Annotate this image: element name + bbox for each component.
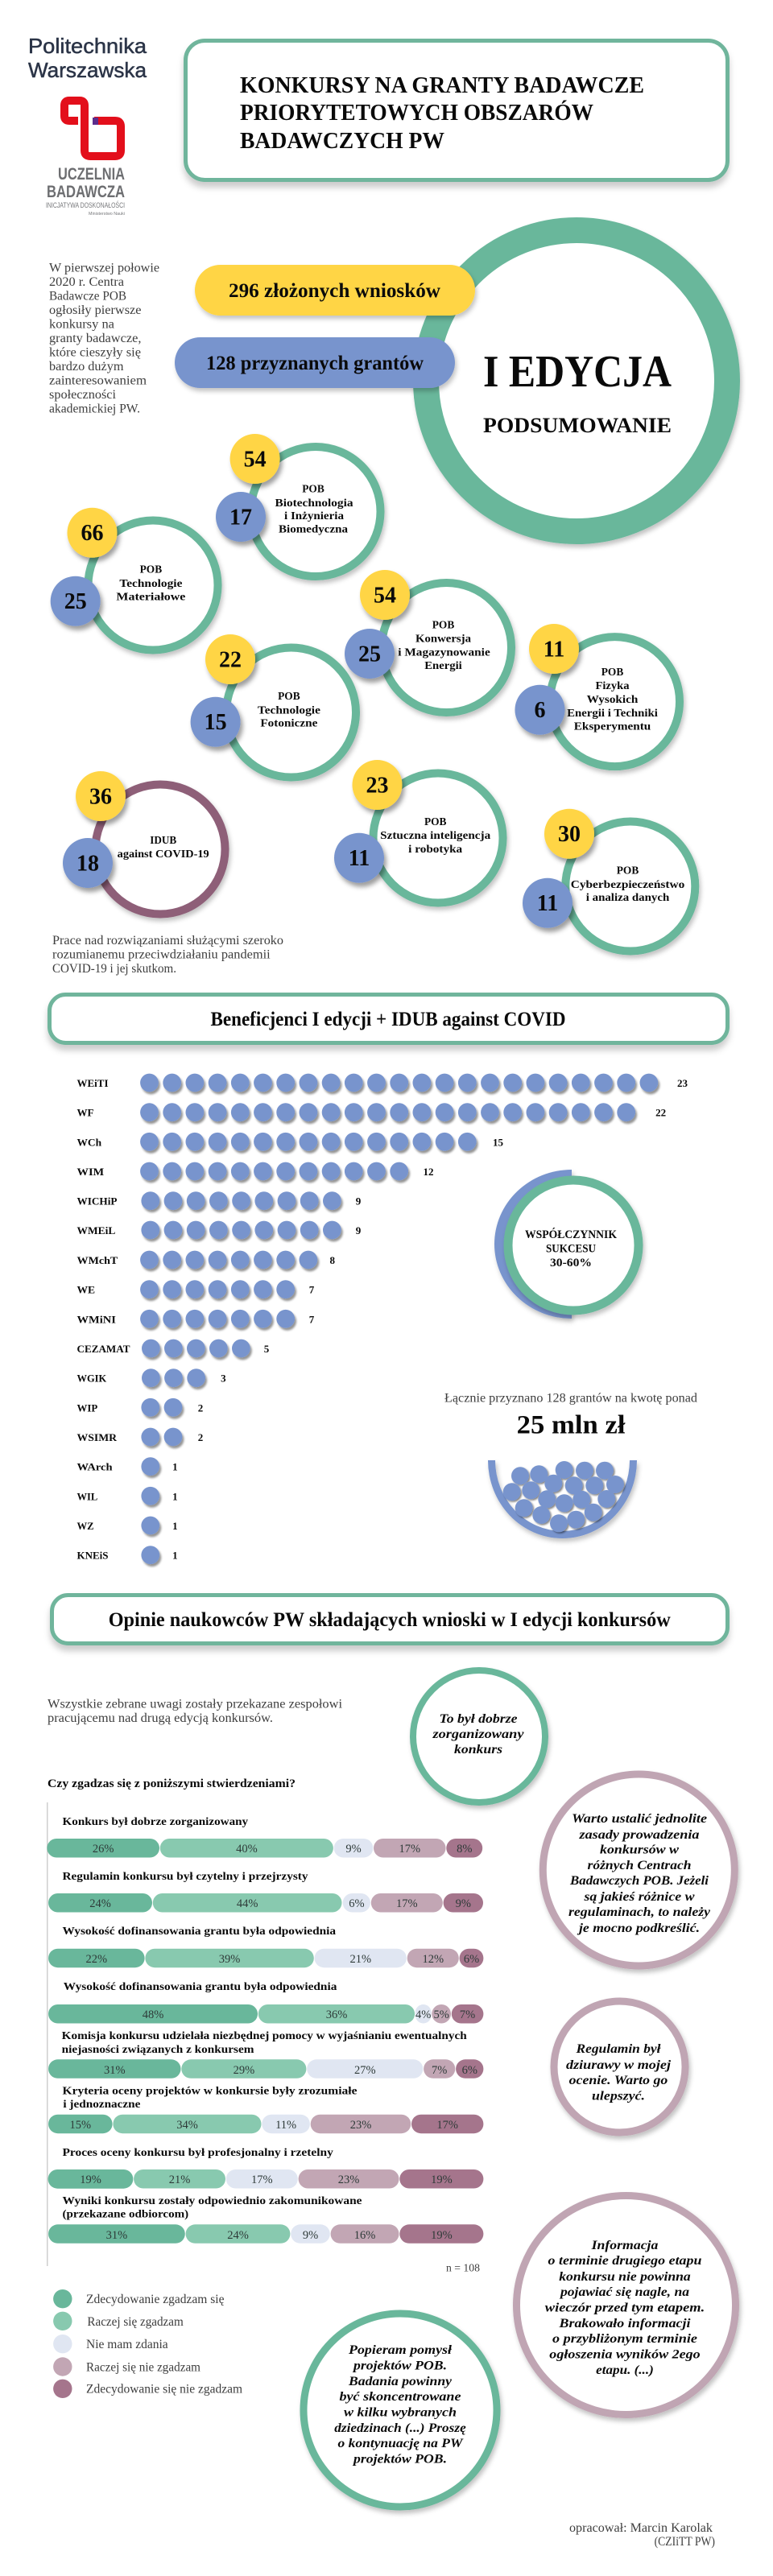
- dot row: KNEiS 1: 1: [172, 1550, 178, 1562]
- ring: POB Cyberbezpieczeństwo: POB: [617, 865, 639, 877]
- ring: POB Biotechnologia: 54: [244, 448, 267, 472]
- total amount text: [444, 1392, 697, 1440]
- total amount text: Łącznie przyznano 128 grantów na kwotę ponad: [444, 1392, 697, 1406]
- bar: Wysokość dofinansowania 2: 48%: [143, 2008, 163, 2021]
- quote: Regulamin był dziurawy: [554, 2001, 685, 2132]
- ring: POB Technologie Fotoniczne: Technologie: [258, 705, 320, 717]
- ring: POB Konwersja: 25: [358, 642, 381, 667]
- dot row: WMchT 8: WMchT: [77, 1254, 118, 1266]
- bar: Wyniki konkursu: (przekazane odbiorcom): [63, 2209, 189, 2221]
- dot row: WEiTI 23: [77, 1074, 688, 1092]
- ring: POB Sztuczna inteligencja: 11: [349, 846, 370, 871]
- dot row: WCh 15: [77, 1133, 504, 1151]
- quote: Warto ustalić jednolite zasady: Badawczych POB. Jeżeli: [569, 1874, 709, 1888]
- quote: Warto ustalić jednolite zasady: różnych Centrach: [588, 1859, 692, 1872]
- ring: POB Fizyka: POB: [601, 667, 623, 679]
- success rate ring: 30-60%: [550, 1257, 592, 1269]
- quote: Informacja o terminie: Informacja: [591, 2239, 658, 2252]
- title panel: BADAWCZYCH PW: [240, 129, 444, 154]
- quote: Popieram pomysł: o kontynuację na PW: [338, 2437, 464, 2450]
- quote: Popieram pomysł: Popieram pomysł: [348, 2343, 453, 2357]
- quote: To był dobrze zorganizowany konkurs: To był dobrze: [440, 1712, 517, 1726]
- bar: Wysokość dofinansowania 1: 12%: [423, 1953, 444, 1966]
- quote: Popieram pomysł: [304, 2314, 497, 2507]
- ring: POB Technologie Fotoniczne: POB: [278, 691, 300, 703]
- dot row: WF 22: 22: [655, 1107, 666, 1119]
- ring: POB Cyberbezpieczeństwo: Cyberbezpieczeństwo: [571, 879, 684, 891]
- ring: POB Konwersja: 54: [374, 583, 396, 609]
- quote: Warto ustalić jednolite zasady: [543, 1774, 734, 1966]
- ring: POB Konwersja: Energii: [424, 660, 462, 672]
- ring: POB Biotechnologia: Biotechnologia: [275, 497, 353, 510]
- dot row: WF 22: [77, 1103, 666, 1121]
- quote: Warto ustalić jednolite zasady: zasady prowadzenia: [578, 1828, 699, 1842]
- dot row: WMEiL 9: [77, 1221, 362, 1239]
- intro text: [49, 261, 159, 415]
- bar: Kryteria oceny: 15%: [70, 2119, 91, 2132]
- bar: Wyniki konkursu: 19%: [431, 2229, 453, 2242]
- question heading: Czy zgadzas się z poniższymi stwierdzeniami?: [48, 1777, 296, 1790]
- legend: [53, 2289, 242, 2398]
- ring: POB Technologie Materiałowe: 25: [64, 589, 87, 614]
- ring: POB Sztuczna inteligencja: Sztuczna inteligencja: [380, 830, 490, 842]
- quote: Informacja o terminie: konkursu nie powinna: [559, 2270, 691, 2284]
- quote: Informacja o terminie: etapu. (...): [596, 2363, 654, 2377]
- intro text: 2020 r. Centra: [49, 275, 124, 289]
- ring: POB Technologie Materiałowe: Materiałowe: [116, 592, 185, 604]
- bar: Konkurs był dobrze zorganizowany: 9%: [345, 1843, 362, 1856]
- ring: POB Biotechnologia: i Inżynieria: [284, 510, 344, 522]
- heading: Opinie: Opinie naukowców PW składających wnioski w I edycji konkursów: [109, 1609, 671, 1631]
- dot row: CEZAMAT 5: [77, 1340, 270, 1357]
- dot row: WMchT 8: 8: [329, 1254, 335, 1266]
- dot row: WE 7: 7: [309, 1284, 315, 1296]
- bar: Regulamin konkursu: [48, 1871, 483, 1913]
- dot row: WIM 12: 12: [424, 1166, 433, 1178]
- bar: Proces oceny: [48, 2147, 483, 2189]
- dot row: WIM 12: WIM: [77, 1166, 104, 1178]
- dot row: WEiTI 23: WEiTI: [77, 1077, 108, 1089]
- ring: POB Konwersja: [345, 570, 511, 712]
- title panel: PRIORYTETOWYCH OBSZARÓW: [240, 101, 593, 126]
- pill: 296 applications: 296 złożonych wniosków: [229, 280, 440, 302]
- IDUB note: Prace nad rozwiązaniami służącymi szeroko: [52, 934, 283, 947]
- bar: Proces oceny: 19%: [80, 2174, 101, 2186]
- success rate ring: WSPÓŁCZYNNIK: [525, 1228, 617, 1241]
- pill: 128 grants: [175, 337, 455, 388]
- dot row: WICHiP 9: 9: [356, 1195, 362, 1208]
- dot row: WGIK 3: [77, 1368, 226, 1387]
- quote: Informacja o terminie: Brakowało informacji: [558, 2317, 691, 2330]
- quote: Warto ustalić jednolite zasady: konkursów w: [600, 1843, 679, 1857]
- legend: Zdecydowanie zgadzam się: [86, 2293, 225, 2306]
- bar: Wyniki konkursu: Wyniki konkursu zostały odpowiednio zakomunikowane: [63, 2195, 362, 2207]
- bar: Komisja konkursu: 29%: [234, 2064, 254, 2077]
- dot row: WZ 1: [77, 1517, 178, 1534]
- dot row: KNEiS 1: [77, 1546, 178, 1564]
- dot row: WCh 15: 15: [493, 1136, 504, 1148]
- ring: POB Sztuczna inteligencja: POB: [424, 816, 446, 828]
- big ring: I edycja podsumowanie: I EDYCJA: [483, 347, 672, 397]
- ring: POB Fizyka: 6: [535, 698, 546, 723]
- bar: Komisja konkursu: 31%: [104, 2064, 126, 2077]
- dot row: WICHiP 9: [77, 1191, 362, 1210]
- opinions intro text: Wszystkie zebrane uwagi zostały przekazane zespołowi: [48, 1698, 343, 1711]
- big ring: I edycja podsumowanie: PODSUMOWANIE: [483, 414, 672, 437]
- dot row: CEZAMAT 5: CEZAMAT: [77, 1343, 130, 1355]
- quote: Popieram pomysł: projektów POB.: [352, 2359, 447, 2373]
- ring: POB Biotechnologia: 17: [229, 506, 252, 530]
- logo: Uczelnia Badawcza: [46, 101, 125, 217]
- bar: Wysokość dofinansowania 2: 7%: [460, 2008, 475, 2021]
- bar: Wyniki konkursu: 9%: [303, 2229, 318, 2242]
- IDUB note: [52, 934, 283, 976]
- bar: Proces oceny: 17%: [251, 2174, 273, 2186]
- logo: Politechnika Warszawska: Politechnika: [28, 34, 147, 58]
- quote: Popieram pomysł: być skoncentrowane: [340, 2390, 461, 2404]
- bar: Proces oceny: 21%: [169, 2174, 190, 2186]
- bar: Proces oceny: Proces oceny konkursu był profesjonalny i rzetelny: [63, 2147, 333, 2159]
- bar: Komisja konkursu: 7%: [432, 2064, 447, 2077]
- dot row: WZ 1: WZ: [77, 1520, 94, 1532]
- quote: Regulamin był dziurawy: ulepszyć.: [592, 2090, 645, 2103]
- quote: Warto ustalić jednolite zasady: regulaminach, to należy: [568, 1905, 711, 1919]
- dot row: WEiTI 23: 23: [677, 1077, 688, 1089]
- dot row: WF 22: WF: [77, 1107, 94, 1119]
- bar: Wyniki konkursu: [48, 2195, 483, 2244]
- quote: Regulamin był dziurawy: dziurawy w mojej: [566, 2058, 672, 2072]
- opinions intro text: pracującemu nad drugą edycją konkursów.: [48, 1711, 273, 1725]
- dot row: WIL 1: 1: [172, 1490, 178, 1502]
- intro text: Badawcze POB: [49, 290, 126, 303]
- bar: Kryteria oceny: Kryteria oceny projektów w konkursie były zrozumiałe: [63, 2085, 358, 2097]
- bar: Regulamin konkursu: Regulamin konkursu był czytelny i przejrzysty: [63, 1871, 308, 1883]
- ring: POB Sztuczna inteligencja: i robotyka: [408, 844, 462, 856]
- bar: Wysokość dofinansowania 2: 5%: [434, 2008, 449, 2021]
- success rate ring: [494, 1170, 639, 1319]
- ring: POB Cyberbezpieczeństwo: [523, 809, 695, 952]
- quote: To był dobrze zorganizowany konkurs: zorganizowany: [432, 1728, 525, 1741]
- bar: Wysokość dofinansowania 1: [48, 1926, 483, 1967]
- quote: Popieram pomysł: w kilku wybranych: [344, 2406, 457, 2420]
- logo: Uczelnia Badawcza: Ministerstwo Nauki: [89, 212, 125, 217]
- sample size: n = 108: [446, 2263, 480, 2275]
- bar: Wyniki konkursu: 16%: [354, 2229, 375, 2242]
- quote: Popieram pomysł: dziedzinach (...) Proszę: [334, 2421, 466, 2435]
- bar: Konkurs był dobrze zorganizowany: [47, 1816, 482, 1858]
- bar: Konkurs był dobrze zorganizowany: 8%: [457, 1843, 472, 1856]
- pill: 128 grants: 128 przyznanych grantów: [206, 353, 424, 374]
- quote: Warto ustalić jednolite zasady: są jakieś różnice w: [583, 1890, 695, 1904]
- quote: Regulamin był dziurawy: Regulamin był: [575, 2042, 661, 2056]
- quote: Popieram pomysł: projektów POB.: [352, 2453, 447, 2467]
- ring: POB Biotechnologia: [216, 434, 380, 576]
- bar: Komisja konkursu: Komisja konkursu udzielała niezbędnej pomocy w wyjaśnianiu ewentualnych: [62, 2030, 467, 2042]
- intro text: konkursy na: [49, 317, 114, 332]
- dot row: WZ 1: 1: [172, 1520, 178, 1532]
- bar: Komisja konkursu: niejasności związanych z konkursem: [62, 2044, 254, 2056]
- intro text: bardzo dużym: [49, 360, 124, 374]
- quote: Informacja o terminie: wieczór przed tym etapem.: [545, 2301, 705, 2315]
- ring: POB Sztuczna inteligencja: 23: [366, 773, 388, 799]
- quote: Regulamin był dziurawy: ocenie. Warto go: [569, 2074, 668, 2087]
- dot row: WGIK 3: 3: [221, 1373, 226, 1385]
- ring: POB Konwersja: Konwersja: [415, 634, 471, 646]
- bar: Wysokość dofinansowania 1: 21%: [350, 1953, 371, 1966]
- dot row: WIP 2: WIP: [77, 1402, 97, 1414]
- legend: Nie mam zdania: [86, 2338, 168, 2351]
- icon: bowl of coins: [488, 1460, 637, 1538]
- bar: Komisja konkursu: 6%: [462, 2064, 477, 2077]
- dot row: WArch 1: WArch: [77, 1461, 113, 1473]
- quote: To był dobrze zorganizowany konkurs: [413, 1670, 545, 1802]
- dot row: WIL 1: WIL: [77, 1490, 98, 1502]
- ring: POB Technologie Fotoniczne: 15: [205, 710, 227, 735]
- dot row: WICHiP 9: WICHiP: [77, 1195, 118, 1208]
- ring: IDUB against COVID-19: 18: [76, 852, 99, 876]
- bar: Konkurs był dobrze zorganizowany: 40%: [236, 1843, 258, 1856]
- dot row: WE 7: WE: [77, 1284, 95, 1296]
- dot row: CEZAMAT 5: 5: [264, 1343, 270, 1355]
- logo: Uczelnia Badawcza: BADAWCZA: [47, 183, 125, 201]
- ring: POB Konwersja: POB: [432, 620, 454, 632]
- bar: Wyniki konkursu: 31%: [106, 2229, 127, 2242]
- IDUB note: rozumianemu przeciwdziałaniu pandemii: [52, 948, 271, 962]
- ring: IDUB against COVID-19: IDUB: [150, 835, 176, 847]
- dot row: WMiNI 7: WMiNI: [77, 1313, 116, 1325]
- quote: Warto ustalić jednolite zasady: Warto ustalić jednolite: [572, 1812, 707, 1826]
- pill: 296 applications: [195, 265, 475, 316]
- legend: Raczej się nie zgadzam: [86, 2361, 200, 2375]
- logo: Politechnika Warszawska: Warszawska: [28, 58, 147, 82]
- title panel: KONKURSY NA GRANTY BADAWCZE: [240, 73, 644, 98]
- bar: Kryteria oceny: 23%: [350, 2119, 371, 2132]
- ring: POB Fizyka: [515, 624, 680, 766]
- logo: Uczelnia Badawcza: UCZELNIA: [58, 165, 125, 184]
- heading: Beneficjenci: Beneficjenci I edycji + IDUB against COVID: [211, 1009, 565, 1030]
- bar: Wysokość dofinansowania 1: Wysokość dofinansowania grantu była odpowiednia: [63, 1926, 336, 1938]
- quote: Informacja o terminie: o przybliżonym terminie: [552, 2332, 697, 2346]
- bar: Wysokość dofinansowania 1: 6%: [464, 1953, 479, 1966]
- dot row: WCh 15: WCh: [77, 1136, 102, 1148]
- dot row: WIP 2: [77, 1398, 203, 1417]
- ring: POB Fizyka: Energii i Techniki: [567, 708, 658, 720]
- bar: Wysokość dofinansowania 1: 39%: [219, 1953, 240, 1966]
- bar: Konkurs był dobrze zorganizowany: 17%: [399, 1843, 420, 1856]
- bar: Konkurs był dobrze zorganizowany: 26%: [93, 1843, 114, 1856]
- dot row: WGIK 3: WGIK: [77, 1373, 107, 1385]
- quote: Informacja o terminie: pojawiać się nagle, na: [559, 2285, 689, 2299]
- dot row: WMchT 8: [77, 1251, 335, 1269]
- legend: Zdecydowanie się nie zgadzam: [86, 2382, 242, 2396]
- intro text: społeczności: [49, 388, 117, 402]
- ring: POB Cyberbezpieczeństwo: 30: [558, 822, 581, 847]
- dot row: WE 7: [77, 1280, 315, 1298]
- intro text: zainteresowaniem: [49, 374, 147, 388]
- bar: Regulamin konkursu: 24%: [89, 1897, 111, 1910]
- intro text: które cieszyły się: [49, 346, 141, 359]
- heading: Beneficjenci: [50, 995, 728, 1043]
- IDUB note: COVID-19 i jej skutkom.: [52, 962, 176, 976]
- ring: POB Fizyka: Wysokich: [587, 694, 639, 706]
- quote: Popieram pomysł: Badania powinny: [348, 2375, 453, 2388]
- quote: Informacja o terminie: o terminie drugiego etapu: [548, 2254, 702, 2268]
- bar: Wysokość dofinansowania 2: [48, 1981, 483, 2024]
- dot row: KNEiS 1: KNEiS: [77, 1550, 108, 1562]
- bar: Kryteria oceny: 17%: [436, 2119, 458, 2132]
- dot row: WSIMR 2: 2: [198, 1431, 203, 1443]
- opinions intro text: [48, 1698, 343, 1725]
- bar: Proces oceny: 19%: [431, 2174, 453, 2186]
- logo: Politechnika Warszawska: [28, 34, 147, 82]
- bar: Kryteria oceny: 34%: [176, 2119, 198, 2132]
- bar: Regulamin konkursu: 9%: [456, 1897, 471, 1910]
- intro text: ogłosiły pierwsze: [49, 303, 142, 317]
- intro text: W pierwszej połowie: [49, 261, 159, 275]
- bar: Wysokość dofinansowania 1: 22%: [86, 1953, 107, 1966]
- ring: POB Technologie Fotoniczne: 22: [219, 647, 242, 673]
- logo: Uczelnia Badawcza: INICJATYWA DOSKONAŁOŚCI: [46, 200, 125, 209]
- intro text: granty badawcze,: [49, 332, 142, 345]
- dot row: WArch 1: [77, 1457, 178, 1476]
- footer credit: [569, 2521, 715, 2549]
- dot row: WArch 1: 1: [172, 1461, 178, 1473]
- bar: Kryteria oceny: [48, 2085, 483, 2133]
- title panel: [185, 40, 728, 180]
- dot row: WIP 2: 2: [198, 1402, 203, 1414]
- dot row: WSIMR 2: [77, 1428, 203, 1446]
- ring: POB Fizyka: Fizyka: [596, 680, 630, 692]
- ring: POB Biotechnologia: POB: [302, 484, 324, 496]
- ring: POB Technologie Fotoniczne: [191, 634, 356, 778]
- bar: Komisja konkursu: 27%: [354, 2064, 376, 2077]
- intro text: akademickiej PW.: [49, 402, 140, 415]
- bar: Wysokość dofinansowania 2: 36%: [326, 2008, 347, 2021]
- bar: Kryteria oceny: i jednoznaczne: [63, 2099, 140, 2111]
- footer credit: opracował: Marcin Karolak: [569, 2521, 713, 2535]
- ring: IDUB against COVID-19: against COVID-19: [118, 848, 209, 861]
- ring: POB Technologie Materiałowe: 66: [81, 521, 103, 546]
- ring: POB Biotechnologia: Biomedyczna: [279, 524, 348, 536]
- ring: POB Technologie Materiałowe: Technologie: [119, 578, 182, 590]
- big ring: I edycja podsumowanie: [426, 230, 727, 531]
- ring: IDUB against COVID-19: [63, 771, 225, 914]
- bar: Regulamin konkursu: 17%: [396, 1897, 418, 1910]
- dot row: WMEiL 9: 9: [356, 1224, 362, 1236]
- legend: Raczej się zgadzam: [87, 2315, 184, 2329]
- total amount text: 25 mln zł: [517, 1411, 625, 1440]
- ring: IDUB against COVID-19: 36: [89, 784, 112, 810]
- dot row: WIL 1: [77, 1487, 178, 1505]
- bar: Wysokość dofinansowania 2: 4%: [415, 2008, 431, 2021]
- ring: POB Konwersja: i Magazynowanie: [398, 647, 490, 659]
- bar: Regulamin konkursu: 44%: [237, 1897, 258, 1910]
- ring: POB Technologie Fotoniczne: Fotoniczne: [260, 718, 317, 730]
- heading: Opinie: [52, 1596, 728, 1644]
- bar: Konkurs był dobrze zorganizowany: Konkurs był dobrze zorganizowany: [63, 1816, 248, 1828]
- bar: Wysokość dofinansowania 2: Wysokość dofinansowania grantu była odpowiednia: [64, 1981, 337, 1993]
- dot row: WIM 12: [77, 1162, 433, 1180]
- ring: POB Fizyka: 11: [544, 638, 564, 662]
- ring: POB Fizyka: Eksperymentu: [574, 721, 651, 733]
- bar: Proces oceny: 23%: [338, 2174, 359, 2186]
- bar: Kryteria oceny: 11%: [275, 2119, 296, 2132]
- quote: To był dobrze zorganizowany konkurs: konkurs: [454, 1743, 502, 1757]
- ring: POB Cyberbezpieczeństwo: 11: [537, 891, 558, 916]
- ring: POB Sztuczna inteligencja: [334, 760, 502, 903]
- bar: Komisja konkursu: [48, 2030, 483, 2079]
- dot row: WSIMR 2: WSIMR: [77, 1431, 118, 1443]
- dot row: WMEiL 9: WMEiL: [77, 1224, 116, 1236]
- dot row: WMiNI 7: [77, 1310, 315, 1328]
- ring: POB Technologie Materiałowe: POB: [140, 564, 162, 576]
- bar: Regulamin konkursu: 6%: [349, 1897, 365, 1910]
- quote: Warto ustalić jednolite zasady: je mocno podkreślić.: [577, 1922, 700, 1935]
- footer credit: (CZIiTT PW): [655, 2535, 715, 2549]
- dot row: WMiNI 7: 7: [309, 1313, 315, 1325]
- quote: Informacja o terminie: ogłoszenia wyników 2ego: [549, 2348, 701, 2362]
- ring: POB Cyberbezpieczeństwo: i analiza danych: [586, 892, 669, 904]
- bar: Wyniki konkursu: 24%: [227, 2229, 249, 2242]
- quote: Informacja o terminie: [517, 2196, 736, 2415]
- success rate ring: SUKCESU: [546, 1243, 596, 1256]
- ring: POB Technologie Materiałowe: [51, 508, 217, 650]
